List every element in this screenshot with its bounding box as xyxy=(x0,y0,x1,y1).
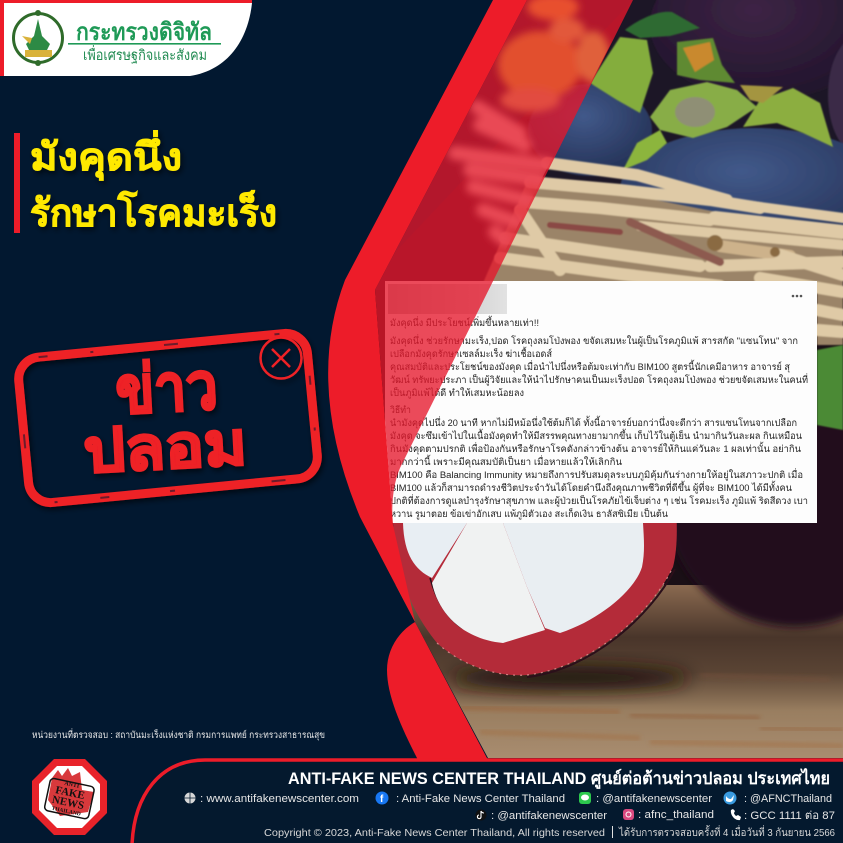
green rule xyxy=(68,43,221,45)
icon: website xyxy=(184,792,196,804)
icon: tiktok xyxy=(476,810,486,820)
contact row 1 xyxy=(184,792,832,805)
post text: หวาน รูมาตอย ข้อเข่าอักเสบ แพ้ภูมิตัวเอง สะเก็ดเงิน ธาลัสซิเมีย เป็นต้น xyxy=(390,507,668,520)
copyright and review date xyxy=(264,825,835,839)
translucent red diagonal overlay xyxy=(375,0,633,525)
post text: คุณสมบัติและประโยชน์ของมังคุด เมื่อนำไปนึ่งหรือต้มจะเท่ากับ BIM100 สูตรนี้นักเคมีอาหาร อาจารย์ สุ xyxy=(390,359,790,373)
stamp text: ข่าว xyxy=(114,348,219,427)
cut mangosteen xyxy=(393,523,677,678)
logo panel xyxy=(0,0,252,76)
ministry tagline: เพื่อเศรษฐกิจและสังคม xyxy=(83,45,207,64)
icon: phone xyxy=(731,809,741,820)
contact row 1: : www.antifakenewscenter.com xyxy=(200,793,359,805)
photo: mangosteens in a basket on a wooden table xyxy=(330,0,843,760)
wood grain xyxy=(460,675,843,746)
contact row 1: : @antifakenewscenter xyxy=(596,793,712,805)
anti-fake news badge: THAILAND xyxy=(51,806,81,818)
icon: line xyxy=(579,792,591,804)
anti-fake news badge xyxy=(32,759,107,835)
contact row 2: : GCC 1111 ต่อ 87 xyxy=(744,810,835,822)
facebook post screenshot xyxy=(385,281,817,523)
cast shadow of cut fruit xyxy=(450,666,690,690)
contact row 2: : @antifakenewscenter xyxy=(491,810,607,822)
cross badge xyxy=(260,338,302,378)
red crescent, lower xyxy=(387,622,488,760)
icon: twitter xyxy=(724,792,736,804)
contact row 2: : afnc_thailand xyxy=(638,809,714,821)
contact row 1: : @AFNCThailand xyxy=(744,793,832,805)
blue mangosteen, centre xyxy=(620,127,843,226)
dark mangosteen, right xyxy=(677,537,843,632)
plum mangosteen, top xyxy=(652,0,843,90)
ministry name: กระทรวงดิจิทัล xyxy=(76,19,212,46)
post text: เปลือกมังคุดรักษาเซลล์มะเร็ง ฆ่าเชื้อเอดส์ xyxy=(390,346,552,360)
title: รักษาโรคมะเร็ง xyxy=(30,190,277,235)
stamp text xyxy=(79,347,248,485)
post text: BIM100 แล้วก็สามารถดำรงชีวิตประจำวันได้โดยคำนึงถึงคุณภาพชีวิตที่ดีขึ้น ผู้ที่จะ BIM100 ได้มีทั้งคน xyxy=(390,480,792,494)
options dots xyxy=(792,295,802,297)
post text: มังคุดนึ่ง มีประโยชน์เพิ่มขึ้นหลายเท่า!! xyxy=(390,315,539,329)
footer heading: ANTI-FAKE NEWS CENTER THAILAND ศูนย์ต่อต้านข่าวปลอม ประเทศไทย xyxy=(288,768,830,790)
anti-fake news badge: FAKE xyxy=(54,784,86,802)
post text xyxy=(389,315,808,520)
stamp text: ปลอม xyxy=(82,410,248,485)
post text: มากกว่านี้ เพราะมีคุณสมบัติเป็นยา เมื่อหายแล้วให้เลิกกิน xyxy=(390,454,622,468)
copyright and review date: Copyright © 2023, Anti-Fake News Center Thailand, All rights reserved xyxy=(264,827,605,839)
source note: หน่วยงานที่ตรวจสอบ : สถาบันมะเร็งแห่งชาติ กรมการแพทย์ กระทรวงสาธารณสุข xyxy=(32,728,325,741)
blurred orange fruit and red basket seen through the overlay xyxy=(455,0,610,240)
post text: ปกติที่ต้องการดูแลบำรุงรักษาสุขภาพ และผู้ป่วยเป็นโรคภัยไข้เจ็บต่าง ๆ เช่น โรคมะเร็ง ภูมิแพ้ ริดสีดวง เบา xyxy=(390,494,808,507)
contact row 1: : Anti-Fake News Center Thailand xyxy=(396,793,565,805)
green leaf at right edge xyxy=(817,345,843,430)
white flesh segments xyxy=(403,523,467,578)
contact row 2 xyxy=(476,809,835,822)
icon: facebook xyxy=(376,792,388,805)
post text: วัฒน์ ทรัพยะประภา เป็นผู้วิจัยและให้นำไปรักษาคนเป็นมะเร็งปอด โรคถุงลมโป่งพอง ช่วยขจัดเสมหะในคนที่ xyxy=(390,373,808,386)
post text: วิธีทำ xyxy=(389,404,411,416)
plum mangosteen, right edge xyxy=(828,44,843,144)
post text: เป็นภูมิแพ้ได้ดี ทำให้เสมหะน้อยลง xyxy=(390,386,524,399)
wicker basket xyxy=(480,163,843,345)
icon: instagram xyxy=(623,809,634,820)
anti-fake news badge: NEWS xyxy=(51,794,85,812)
post text: BIM100 คือ Balancing Immunity หมายถึงการปรับสมดุลระบบภูมิคุ้มกันร่างกายให้อยู่ในสภาวะปกติ เมื่อ xyxy=(390,468,803,481)
post text: กินมังคุดตามปรกติ เพื่อป้องกันหรือรักษาโรคดังกล่าวข้างต้น อาจารย์ให้กินแค่วันละ 1 ผลเท่านั้น อย่ากิน xyxy=(390,441,801,455)
solid red diagonal band xyxy=(328,0,527,622)
post text: นำมังคุดไปนึ่ง 20 นาที หากไม่มีหม้อนึ่งใช้ต้มก็ได้ ทั้งนี้อาจารย์บอกว่านึ่งจะดีกว่า สารแซนโทนจากเปลือก xyxy=(390,415,797,429)
anti-fake news badge: ANTI xyxy=(64,781,80,790)
icon: facebook: f xyxy=(380,794,384,805)
title xyxy=(14,130,277,235)
footer panel xyxy=(132,760,843,843)
post text: มังคุด จะซึมเข้าไปในเนื้อมังคุดทำให้มีสรรพคุณทางยามากขึ้น เก็บไว้ในตู้เย็น นำมากินวันละผล กินเหมือน xyxy=(390,428,802,442)
blurred profile name xyxy=(388,284,507,314)
title: มังคุดนึ่ง xyxy=(30,130,182,181)
wooden table xyxy=(396,585,843,758)
fake news stamp xyxy=(17,331,319,505)
blue mangosteen, left xyxy=(528,84,652,176)
rind xyxy=(393,523,677,676)
green calyx pieces xyxy=(590,12,833,170)
post text: มังคุดนึ่ง ช่วยรักษามะเร็ง,ปอด โรคถุงลมโป่งพอง ขจัดเสมหะในผู้เป็นโรคภูมิแพ้ สารสกัด "แซนโทน" จาก xyxy=(390,334,798,347)
ministry emblem xyxy=(14,10,62,66)
